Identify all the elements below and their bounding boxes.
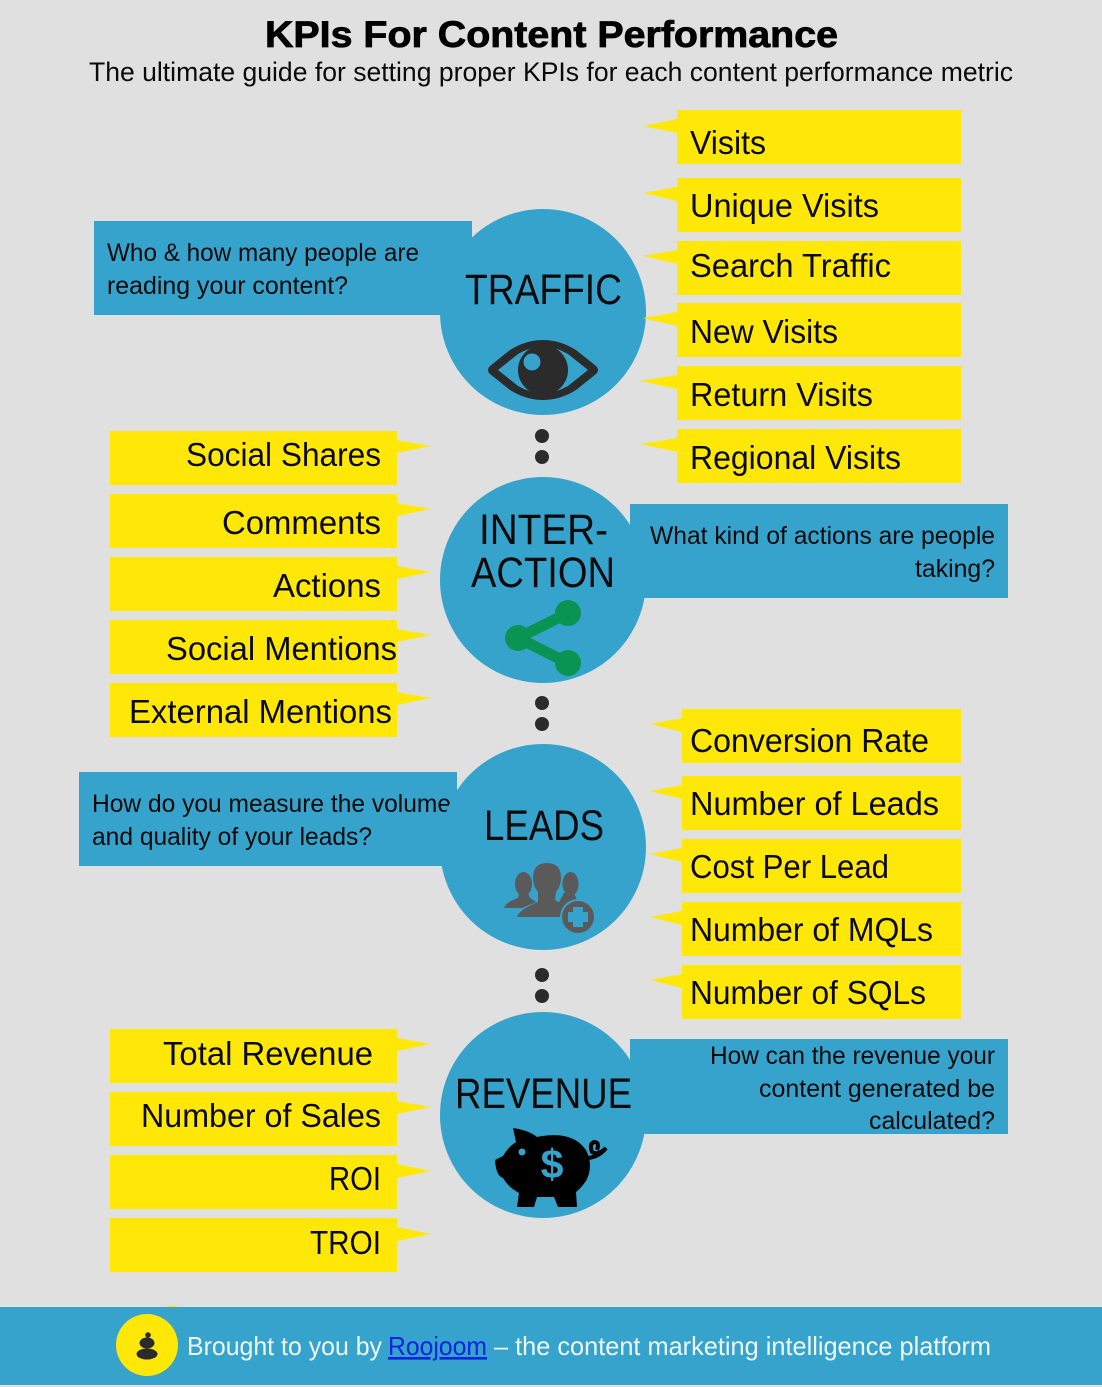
icon: piggy bank — [495, 1128, 606, 1207]
leads question callout: and quality of your leads? — [92, 823, 372, 851]
revenue question callout: content generated be — [759, 1075, 995, 1103]
traffic metric: Unique Visits — [643, 178, 961, 232]
icon: share — [505, 600, 581, 676]
traffic metric: Regional Visits: Regional Visits — [690, 439, 901, 476]
traffic question callout: reading your content? — [107, 272, 348, 300]
icon: people with plus — [504, 863, 596, 935]
icon: Roojoom logo — [116, 1314, 178, 1376]
subtitle: The ultimate guide for setting proper KPIs for each content performance metric — [89, 57, 1013, 87]
interaction circle — [440, 477, 646, 683]
interaction metric: Comments: Comments — [222, 504, 381, 541]
traffic metric: Search Traffic — [643, 241, 961, 295]
icon: eye — [488, 340, 598, 400]
traffic metric: Visits: Visits — [690, 124, 766, 161]
traffic metric: Return Visits: Return Visits — [690, 376, 873, 413]
traffic metric: New Visits: New Visits — [690, 313, 838, 350]
interaction question callout: taking? — [915, 555, 995, 583]
revenue question callout — [630, 1039, 1008, 1135]
traffic circle — [440, 209, 646, 415]
leads metric: Number of Leads — [650, 776, 961, 830]
interaction metric: Social Shares — [110, 431, 431, 485]
interaction heading — [471, 506, 615, 597]
leads metric: Cost Per Lead — [650, 839, 961, 893]
traffic heading: TRAFFIC — [465, 266, 622, 314]
interaction metric: Social Mentions — [110, 620, 431, 674]
traffic metric: New Visits — [643, 303, 961, 357]
footer credit text: Brought to you by — [187, 1331, 382, 1361]
revenue circle — [440, 1012, 646, 1218]
revenue heading: REVENUE — [455, 1070, 632, 1118]
revenue metric: ROI — [110, 1155, 431, 1209]
panel: traffic — [94, 110, 961, 483]
icon: piggy bank: $ — [541, 1141, 564, 1187]
interaction metric: Comments — [110, 494, 431, 548]
revenue metric: ROI: ROI — [329, 1160, 381, 1197]
interaction heading: ACTION — [471, 549, 615, 597]
traffic question callout — [94, 221, 472, 315]
connector dots: leads to revenue — [535, 968, 549, 1003]
leads metric: Number of MQLs — [650, 902, 961, 956]
leads question callout: How do you measure the volume — [92, 790, 451, 818]
revenue metric: Number of Sales: Number of Sales — [141, 1097, 381, 1134]
revenue question callout: How can the revenue your — [710, 1042, 995, 1070]
panel: interaction — [110, 431, 1008, 737]
leads metric: Number of MQLs: Number of MQLs — [690, 911, 933, 948]
interaction question callout: What kind of actions are people — [650, 522, 995, 550]
panel: leads — [79, 709, 961, 1019]
footer band — [0, 1306, 1102, 1385]
traffic metric: Visits — [643, 110, 961, 164]
interaction metric: External Mentions: External Mentions — [129, 693, 392, 730]
interaction metric: Actions: Actions — [273, 567, 381, 604]
leads metric: Number of SQLs — [650, 965, 961, 1019]
leads metric: Cost Per Lead: Cost Per Lead — [690, 848, 889, 885]
panel: revenue — [110, 1012, 1008, 1272]
revenue metric: Total Revenue — [110, 1029, 431, 1083]
interaction metric: Social Mentions: Social Mentions — [166, 630, 397, 667]
traffic metric: Regional Visits — [640, 429, 961, 483]
footer link: Roojoom — [388, 1331, 487, 1361]
traffic question callout: Who & how many people are — [107, 239, 419, 267]
revenue question callout: calculated? — [869, 1107, 995, 1135]
interaction metric: Social Shares: Social Shares — [186, 436, 381, 473]
leads metric: Number of SQLs: Number of SQLs — [690, 974, 926, 1011]
leads metric: Conversion Rate: Conversion Rate — [690, 722, 929, 759]
traffic metric: Search Traffic: Search Traffic — [690, 247, 891, 284]
revenue metric: TROI: TROI — [310, 1224, 381, 1261]
interaction metric: Actions — [110, 557, 431, 611]
leads metric: Number of Leads: Number of Leads — [690, 785, 939, 822]
title: KPIs For Content Performance — [265, 14, 838, 55]
traffic metric: Unique Visits: Unique Visits — [690, 187, 879, 224]
footer tagline: – the content marketing intelligence platform — [494, 1331, 991, 1361]
leads heading: LEADS — [484, 802, 604, 850]
connector dots: interaction to leads — [535, 696, 549, 731]
connector dots: traffic to interaction — [535, 429, 549, 464]
leads question callout — [79, 772, 457, 866]
revenue metric: Total Revenue: Total Revenue — [163, 1035, 373, 1072]
interaction question callout — [630, 504, 1008, 598]
interaction heading: INTER- — [479, 506, 608, 554]
interaction metric: External Mentions — [110, 683, 431, 737]
traffic metric: Return Visits — [640, 366, 961, 420]
leads metric: Conversion Rate — [650, 709, 961, 763]
leads circle — [440, 744, 646, 950]
revenue metric: Number of Sales — [110, 1092, 431, 1146]
revenue metric: TROI — [110, 1218, 431, 1272]
